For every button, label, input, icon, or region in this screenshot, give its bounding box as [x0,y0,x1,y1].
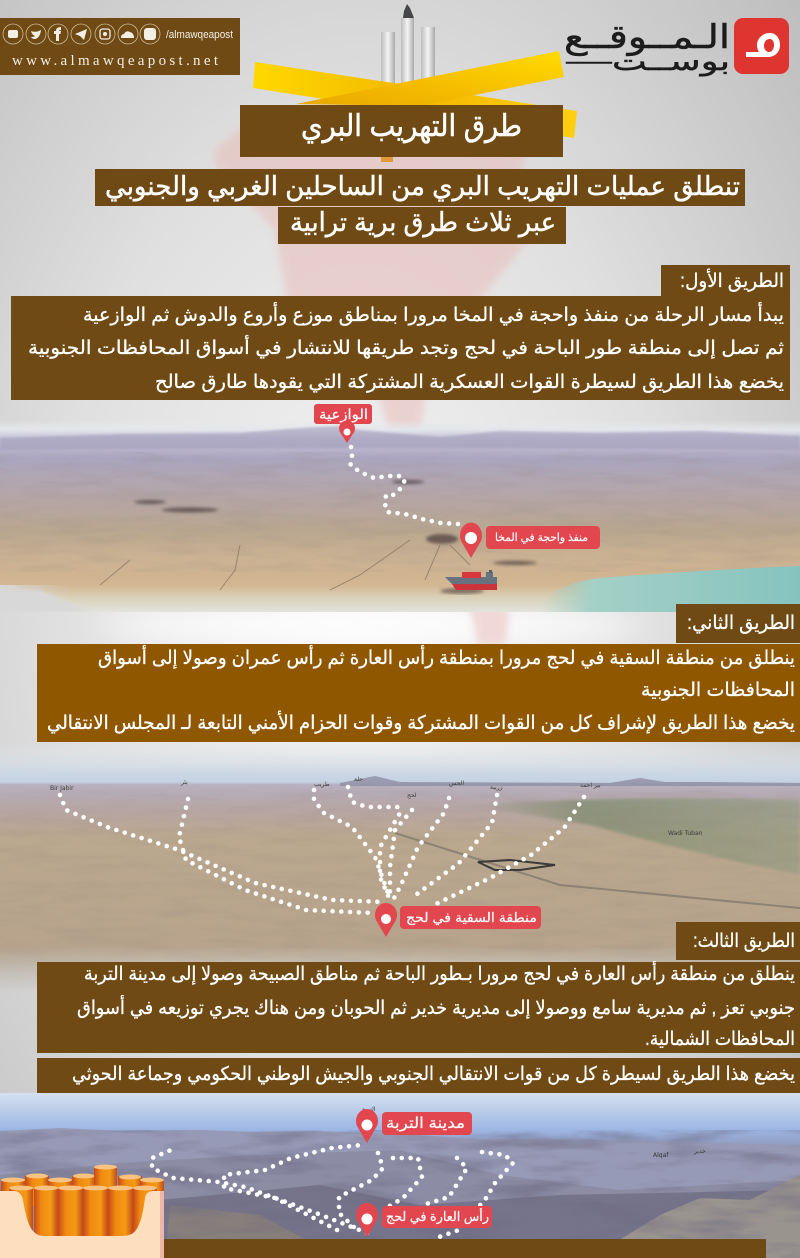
small place names route three [362,1106,706,1159]
front row of cigarettes [9,1188,157,1236]
heading: route one [661,265,790,296]
scene: route two terrain photo [0,742,800,992]
small place names route two: طريب [314,781,330,788]
map pin: Wahija port: منفذ واحجة في المخا [495,532,588,544]
map pin: Ras Al-Arah: رأس العارة في لحج [386,1208,489,1225]
gullies [100,540,470,590]
back row of cigarettes [1,1176,164,1210]
small place names route two: بير احمد [580,782,601,789]
text block: route one: يخضع هذا الطريق لسيطرة القوات العسكرية المشتركة التي يقودها طارق صالح [155,372,784,393]
title [240,105,563,157]
bottom brown bar [164,1239,766,1258]
map pin: Al-Wazi'iyah: الوازعية [319,406,368,423]
icon: cigarettes [381,4,435,84]
heading: route one: ‏الطريق الأول:‏ [680,269,784,292]
small place names route two: Wadi Tuban [668,830,703,837]
text block: route three control [37,1058,800,1093]
text block: route two: المحافظات الجنوبية [641,680,795,701]
scene: route one terrain photo [0,420,800,612]
route two dotted paths [60,787,584,913]
social handle: /almawqeapost [166,29,233,41]
subtitle line two: عبر ثلاث طرق برية ترابية [290,207,556,238]
map pin: Al-Saqiyah [375,903,541,937]
website: www.almawqeapost.net [12,53,219,69]
small place names route three: خدير [693,1148,706,1155]
heading: route three [676,922,800,960]
text block: route three [37,961,800,1053]
small place names route three: Alqaf [653,1152,669,1159]
text block: route one: ثم تصل إلى منطقة طور الباحة في لحج وتجد طريقها للانتشار في أسواق المحافظات الجنوبية [28,335,784,360]
logo wordmark [564,17,730,77]
map pin: Wahija port [460,523,600,558]
map pin: Ras Al-Arah [356,1203,492,1237]
faded red map silhouette [215,110,560,645]
small place names route three: التربة [362,1106,376,1113]
icon: cargo ship [440,570,497,594]
small place names route two [50,776,703,837]
icon: crossed yellow bars with cigarettes [253,4,577,162]
scene: route three mountains photo [0,1093,800,1258]
map pin: Al-Turbah: مدينة التربة [386,1115,465,1132]
text block: route one: يبدأ مسار الرحلة من منفذ واحجة في المخا مرورا بمناطق موزع وأروع والدوش ثم الوازعية [83,302,784,326]
map pin: Al-Wazi'iyah [314,404,372,443]
icon: cigarette pack [0,1164,164,1258]
social icons [3,24,160,44]
social media panel [0,18,240,75]
pack body [0,1191,164,1258]
heading: route two [676,604,800,643]
logo: Almawqea Post [564,17,789,77]
text block: route two [37,644,800,742]
logo wordmark: الـمــوقــع [564,17,730,56]
subtitle line one: تنطلق عمليات التهريب البري من الساحلين الغربي والجنوبي [105,171,740,202]
text block: route one [11,296,790,400]
map pin: Al-Saqiyah: منطقة السقية في لحج [406,910,537,926]
small place names route two: لحج [407,792,417,799]
small place names route two: Bir Jabir [50,785,74,792]
small place names route two: بئر [180,779,188,786]
title: طرق التهريب البري [301,110,522,144]
mountains on horizon [0,426,800,450]
logo wordmark: بوســت [612,47,730,77]
white glow behind route two heading [100,607,640,643]
dark shrub patches [134,480,537,565]
map pin: Al-Turbah [356,1109,472,1143]
heading: route two: ‏الطريق الثاني:‏ [687,613,795,634]
route three dotted paths [152,1145,513,1237]
small place names route two: حلة [354,776,363,783]
sea water [540,566,800,612]
small place names route two: زريبة [490,784,503,791]
small place names route two: الحس [449,780,464,787]
logo glyph [746,33,780,57]
route one dotted path [350,447,459,524]
